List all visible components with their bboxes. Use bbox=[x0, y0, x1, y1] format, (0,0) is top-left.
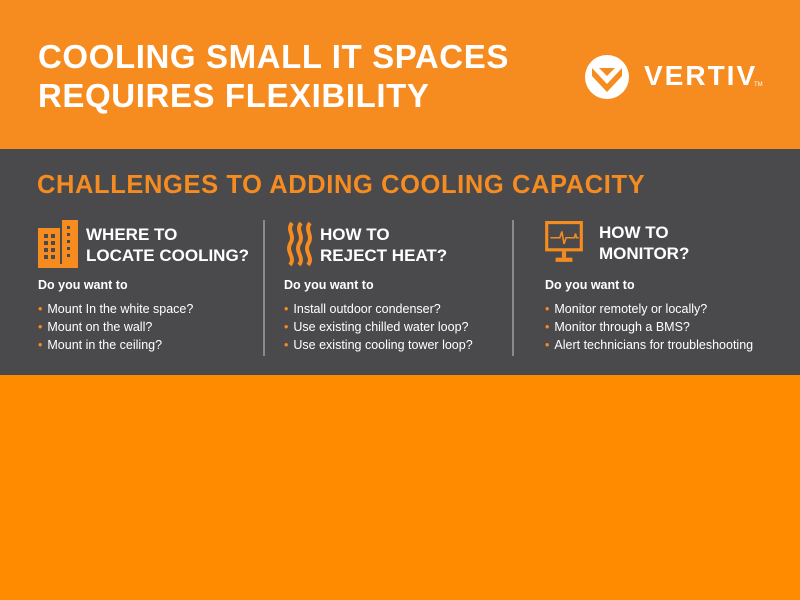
logo: Vertiv: TM bbox=[754, 82, 763, 88]
list: Use existing cooling tower loop? bbox=[293, 338, 473, 352]
heading bbox=[599, 223, 689, 263]
list bbox=[38, 302, 193, 352]
list: Mount In the white space? bbox=[47, 302, 193, 316]
logo: Vertiv bbox=[585, 55, 763, 99]
list: Mount in the ceiling? bbox=[47, 338, 162, 352]
heading bbox=[320, 225, 447, 265]
panel: reject heat bbox=[284, 222, 473, 352]
text: Do you want to bbox=[545, 278, 635, 292]
title: COOLING SMALL IT SPACES bbox=[38, 38, 509, 75]
title: REQUIRES FLEXIBILITY bbox=[38, 77, 430, 114]
heading: MONITOR? bbox=[599, 244, 689, 263]
heading: HOW TO bbox=[599, 223, 669, 242]
title bbox=[38, 38, 509, 114]
list: Install outdoor condenser? bbox=[293, 302, 441, 316]
panel: monitor bbox=[545, 221, 753, 352]
text: Do you want to bbox=[38, 278, 128, 292]
list: Mount on the wall? bbox=[47, 320, 152, 334]
heading bbox=[86, 225, 249, 265]
logo: Vertiv: VERTIV bbox=[644, 60, 757, 91]
icon: heat waves bbox=[287, 222, 312, 266]
heading: HOW TO bbox=[320, 225, 390, 244]
heading: REJECT HEAT? bbox=[320, 246, 447, 265]
icon: monitor bbox=[545, 221, 583, 262]
subheading: CHALLENGES TO ADDING COOLING CAPACITY bbox=[37, 171, 645, 199]
icon: building bbox=[38, 220, 78, 268]
heading: WHERE TO bbox=[86, 225, 177, 244]
panel: where to locate bbox=[38, 220, 249, 352]
list: Use existing chilled water loop? bbox=[293, 320, 468, 334]
list: Monitor remotely or locally? bbox=[554, 302, 707, 316]
heading: LOCATE COOLING? bbox=[86, 246, 249, 265]
list: Alert technicians for troubleshooting bbox=[554, 338, 753, 352]
list bbox=[546, 302, 753, 352]
list: Monitor through a BMS? bbox=[554, 320, 690, 334]
list bbox=[284, 302, 473, 352]
text: Do you want to bbox=[284, 278, 374, 292]
